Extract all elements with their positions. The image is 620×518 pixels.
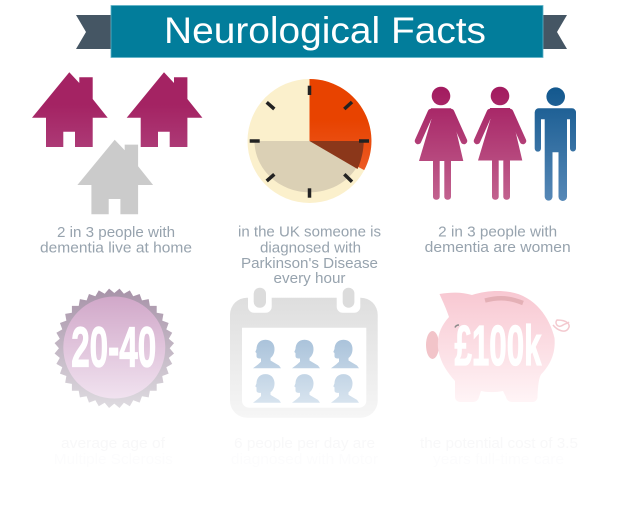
icon: calendar [230, 288, 378, 418]
badge number: 20-40 [71, 316, 156, 380]
icon: woman 2 [477, 87, 523, 200]
panel: dementia women [418, 87, 576, 256]
caption: diagnosed with [260, 241, 361, 257]
icon: pig eye [455, 325, 459, 328]
caption: years full-time care [433, 452, 564, 468]
caption: Multiple Sclerosis [54, 452, 173, 468]
icon: man [535, 87, 576, 201]
caption: 2 in 3 people with [438, 225, 557, 241]
icon: pig snout [426, 331, 439, 359]
panel: motor neurone calendar [230, 288, 378, 468]
caption: Parkinson's Disease [241, 256, 378, 272]
ribbon tail left [76, 15, 111, 49]
caption: dementia live at home [40, 240, 192, 256]
icon: magenta house 1 [32, 72, 108, 147]
caption: dementia are women [425, 240, 571, 256]
icon: pig tail [553, 320, 569, 331]
title banner [76, 6, 567, 58]
clock ticks [250, 86, 369, 198]
icon: woman 1 [418, 87, 464, 200]
caption: the potential cost of 3.5 [420, 436, 578, 452]
badge number: £100k [454, 314, 542, 378]
panel: cost of care piggy bank [420, 291, 578, 468]
orange sector [310, 79, 371, 170]
panel: dementia at home [32, 72, 202, 256]
icon: coin slot [485, 298, 523, 303]
icon: grey house [77, 140, 153, 214]
caption: every hour [274, 271, 346, 287]
caption: 6 people per day are [234, 436, 375, 452]
icon: pig body [438, 291, 555, 402]
panel: Parkinson's clock [238, 79, 381, 287]
icon: starburst badge [54, 288, 174, 408]
clock face [248, 79, 372, 203]
caption: 2 in 3 people with [57, 225, 175, 241]
panel: multiple sclerosis age [54, 288, 174, 408]
title: Neurological Facts [164, 10, 486, 51]
shaded orange area [310, 141, 364, 169]
banner bar [111, 6, 543, 58]
shaded cream area [254, 141, 356, 192]
ribbon tail right [543, 15, 567, 49]
caption: diagnosed with Motor [231, 452, 378, 468]
icon: six people [253, 340, 359, 403]
caption: in the UK someone is [238, 225, 381, 241]
icon: magenta house 2 [127, 72, 202, 147]
caption: average age of [61, 436, 166, 452]
